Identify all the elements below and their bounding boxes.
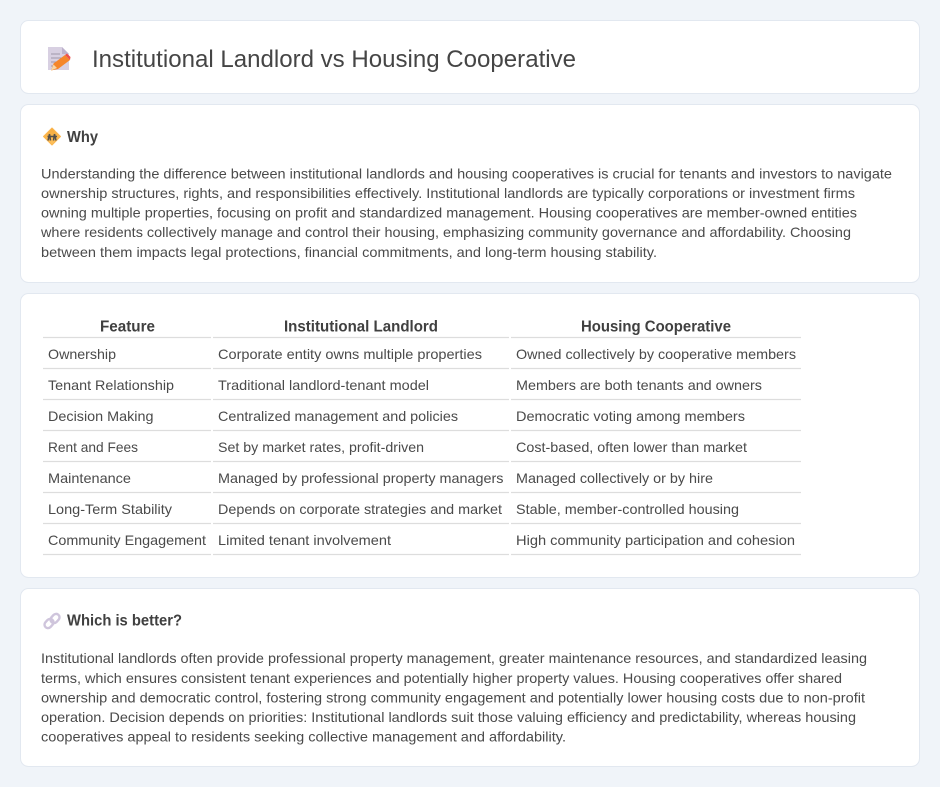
row: community engagement: High community participation and cohesion (516, 532, 795, 548)
text block: which is better paragraph: ownership and democratic control, fostering strong community engagement and potentially lower housing costs due to non-profit (41, 690, 865, 706)
row: decision making: Democratic voting among members (516, 408, 745, 424)
row: tenant relationship: Members are both tenants and owners (516, 377, 762, 393)
icon: children crossing diamond (44, 128, 60, 145)
row: rent and fees: Set by market rates, profit-driven (218, 439, 424, 455)
text block: which is better paragraph: operation. Decision depends on priorities: Institutional landlords suit those valuing efficiency and predictability, whereas housing (41, 709, 856, 725)
row: rent and fees: Rent and Fees (48, 439, 138, 455)
row: tenant relationship (48, 377, 762, 393)
text block: why paragraph: between them impacts legal protections, financial commitments, and long-term housing stability. (41, 244, 657, 260)
panel: why (20, 104, 920, 282)
table header row: Institutional Landlord (284, 318, 438, 336)
icon: chain link (43, 612, 61, 630)
panel: which is better (20, 588, 920, 766)
text block: which is better paragraph: terms, which ensures consistent tenant experiences and potentially higher property values. Housing cooperatives offer shared (41, 670, 842, 686)
row: maintenance (48, 470, 713, 486)
row: maintenance: Maintenance (48, 470, 131, 486)
text block: why paragraph (40, 166, 892, 260)
row: ownership: Corporate entity owns multiple properties (218, 346, 482, 362)
row: community engagement (48, 532, 795, 548)
text block: why paragraph: Understanding the difference between institutional landlords and housing cooperatives is crucial for tenants and investors to navigate (41, 166, 892, 182)
row: maintenance: Managed collectively or by hire (516, 470, 713, 486)
panel: header (20, 20, 920, 94)
panel: comparison table (20, 294, 920, 578)
text block: which is better paragraph (41, 650, 867, 744)
row: decision making: Decision Making (48, 408, 154, 424)
heading: why: Why (67, 129, 98, 146)
heading: which is better: Which is better? (67, 612, 182, 630)
text block: why paragraph: ownership structures, rights, and responsibilities effectively. Institutional landlords are typically corporations or investment firms (41, 185, 855, 201)
row: ownership (48, 346, 796, 362)
row: community engagement: Community Engagement (48, 532, 206, 548)
row: rent and fees: Cost-based, often lower than market (516, 439, 747, 455)
title: Institutional Landlord vs Housing Cooperative (92, 46, 576, 73)
text block: which is better paragraph: cooperatives appeal to residents seeking collective management and affordability. (41, 728, 566, 744)
table header row: Housing Cooperative (581, 318, 731, 336)
table header row (100, 318, 731, 336)
icon: memo with pencil (48, 47, 70, 70)
text block: why paragraph: where residents collectively manage and control their housing, emphasizing community governance and affordability. Choosing (40, 224, 851, 240)
row: long-term stability (48, 501, 739, 517)
row: ownership: Ownership (48, 346, 116, 362)
table header row: Feature (100, 318, 155, 336)
row: maintenance: Managed by professional property managers (218, 470, 504, 486)
row: decision making (48, 408, 745, 424)
row: long-term stability: Long-Term Stability (48, 501, 172, 517)
row: tenant relationship: Tenant Relationship (48, 377, 174, 393)
row: decision making: Centralized management and policies (218, 408, 458, 424)
row: long-term stability: Stable, member-controlled housing (516, 501, 739, 517)
row: tenant relationship: Traditional landlord-tenant model (218, 377, 429, 393)
row: ownership: Owned collectively by cooperative members (516, 346, 796, 362)
row: long-term stability: Depends on corporate strategies and market (218, 501, 502, 517)
text block: which is better paragraph: Institutional landlords often provide professional property management, greater maintenance resources, and standardized leasing (41, 650, 867, 666)
row: rent and fees (48, 439, 747, 455)
row: community engagement: Limited tenant involvement (218, 532, 391, 548)
text block: why paragraph: owning multiple properties, focusing on profit and standardized management. Housing cooperatives are member-owned entities (41, 205, 857, 221)
